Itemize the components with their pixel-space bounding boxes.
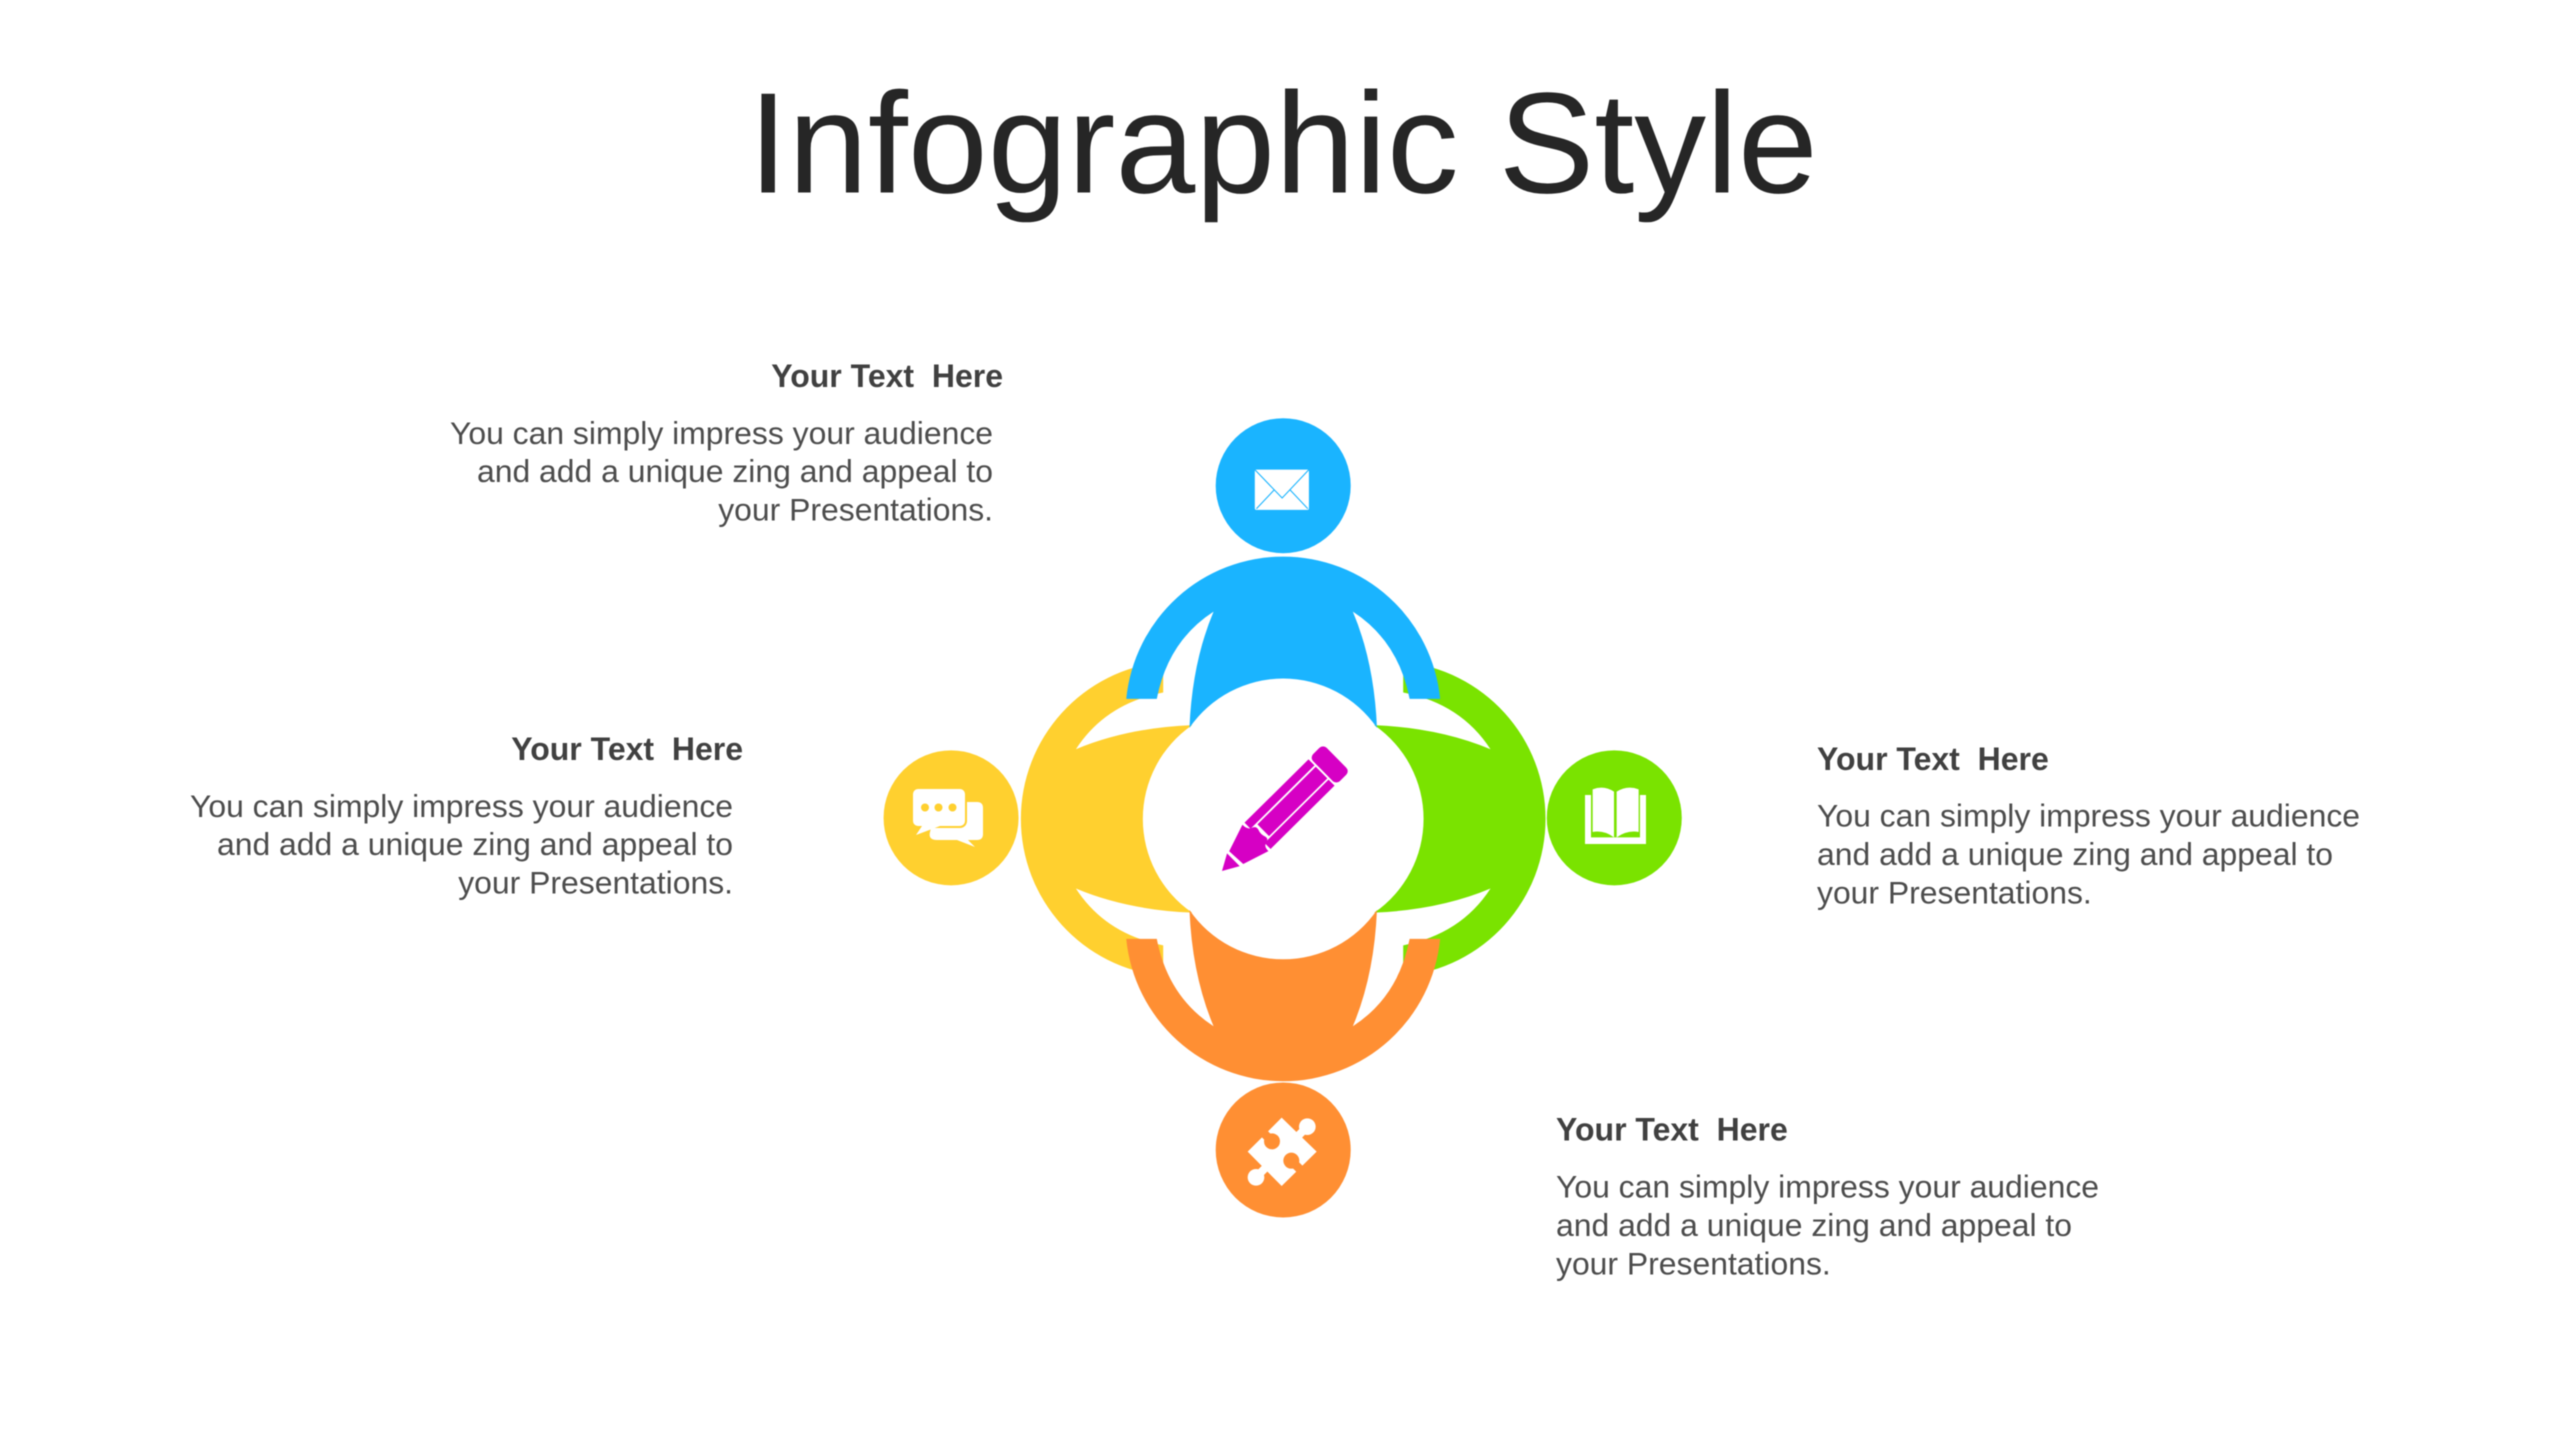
figure body: yellow bbox=[1021, 662, 1192, 976]
icon: pencil bbox=[1209, 744, 1350, 885]
body: bottom right: and add a unique zing and appeal to bbox=[1556, 1207, 2072, 1243]
icon: chat bubbles bbox=[912, 788, 983, 847]
figure head: orange bbox=[1216, 1082, 1351, 1217]
figure head: green bbox=[1547, 750, 1682, 885]
text block: bottom right bbox=[1556, 1112, 2099, 1282]
body: middle right: You can simply impress your audience bbox=[1817, 798, 2360, 834]
text block: middle right bbox=[1817, 741, 2360, 910]
text block: middle left bbox=[190, 731, 743, 900]
icon: puzzle piece bbox=[1248, 1118, 1317, 1186]
body: middle left: and add a unique zing and appeal to bbox=[217, 826, 733, 862]
heading: top left: Your Text Here bbox=[771, 358, 1003, 394]
icon: open book bbox=[1585, 788, 1646, 844]
figure head: yellow bbox=[884, 750, 1019, 885]
body: bottom right: You can simply impress your audience bbox=[1556, 1168, 2099, 1204]
figure head: blue bbox=[1216, 418, 1351, 553]
body: middle right: your Presentations. bbox=[1817, 874, 2092, 910]
body: top left: your Presentations. bbox=[718, 492, 993, 528]
body: middle right: and add a unique zing and appeal to bbox=[1817, 836, 2333, 872]
diagram: four figures around a centre bbox=[884, 418, 1682, 1217]
figure body: green bbox=[1374, 662, 1546, 976]
body: top left: and add a unique zing and appeal to bbox=[477, 453, 993, 489]
figure body: orange bbox=[1126, 910, 1440, 1081]
title: Infographic Style bbox=[748, 64, 1818, 224]
icon: envelope bbox=[1255, 470, 1309, 510]
heading: bottom right: Your Text Here bbox=[1556, 1112, 1788, 1148]
heading: middle left: Your Text Here bbox=[511, 731, 743, 767]
body: top left: You can simply impress your audience bbox=[450, 415, 993, 451]
heading: middle right: Your Text Here bbox=[1817, 741, 2049, 777]
text block: top left bbox=[450, 358, 1003, 528]
figure body: blue bbox=[1126, 557, 1440, 728]
body: middle left: your Presentations. bbox=[458, 864, 733, 900]
body: bottom right: your Presentations. bbox=[1556, 1246, 1831, 1282]
body: middle left: You can simply impress your audience bbox=[190, 788, 733, 824]
